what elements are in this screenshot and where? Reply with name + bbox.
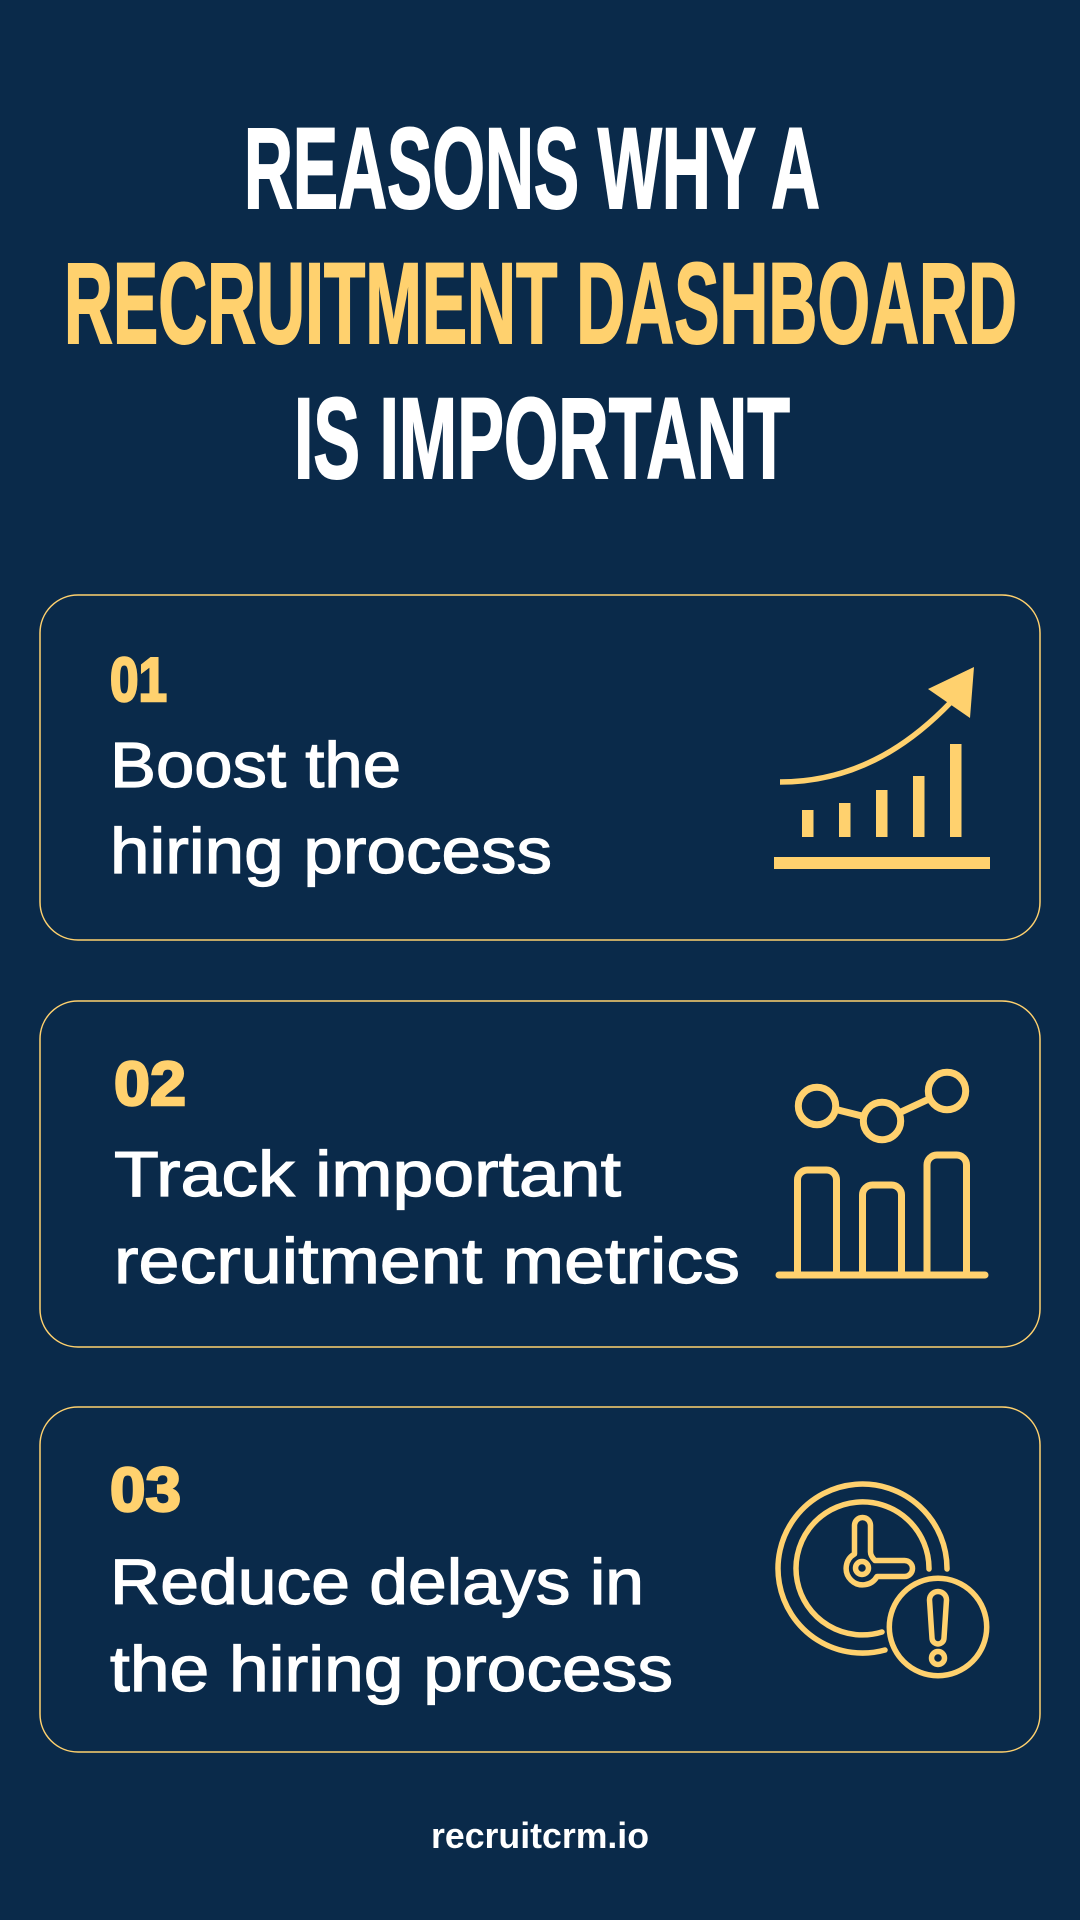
text: boost the hiring process: [110, 729, 552, 887]
panel: boost the hiring process: [40, 595, 1040, 940]
text: track important recruitment metrics: Track important: [114, 1138, 621, 1210]
number 01: 01: [110, 646, 167, 715]
icon: rising bar chart with arrow: [774, 667, 990, 869]
text: reduce delays in the hiring process: Reduce delays in: [110, 1546, 644, 1618]
panel: reduce delays in the hiring process: [40, 1407, 1040, 1752]
number 02: 02: [114, 1050, 186, 1119]
icon: line and bar metrics chart: [779, 1072, 985, 1275]
text: boost the hiring process: Boost the: [110, 729, 401, 801]
text: boost the hiring process: hiring process: [110, 815, 552, 887]
text: track important recruitment metrics: recruitment metrics: [114, 1225, 740, 1297]
text: reduce delays in the hiring process: the hiring process: [110, 1633, 673, 1705]
panel: track important recruitment metrics: [40, 1001, 1040, 1347]
text: reduce delays in the hiring process: [110, 1546, 673, 1705]
icon: clock with alert: [778, 1484, 987, 1676]
footer: website: recruitcrm.io: [431, 1815, 649, 1856]
number 03: 03: [110, 1456, 181, 1525]
title: [64, 105, 1017, 503]
text: track important recruitment metrics: [114, 1138, 740, 1297]
